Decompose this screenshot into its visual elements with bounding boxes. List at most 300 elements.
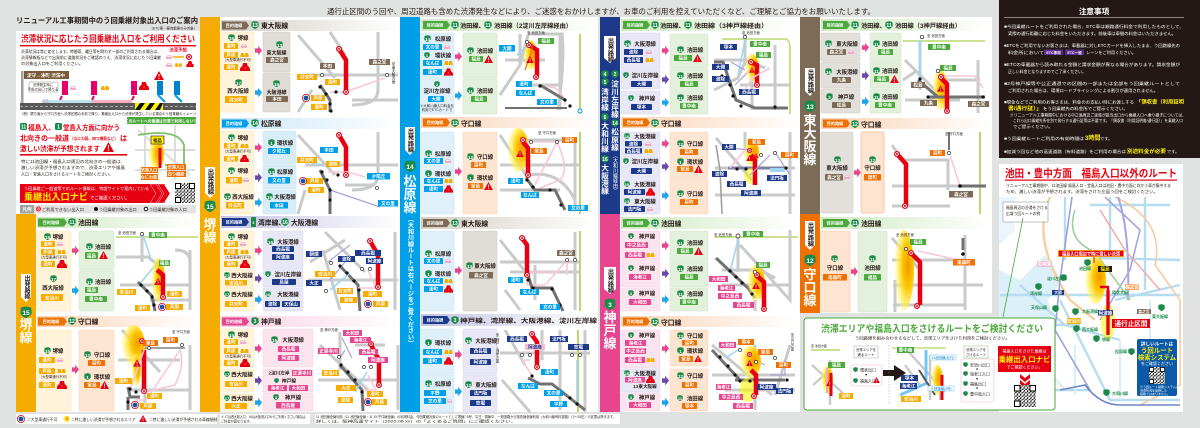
mini map: 福島 <box>153 137 162 144</box>
map: Higashi-Osaka to Ikeda: 至 池田方面 <box>927 33 946 38</box>
header: Ikeda via Kobe: 11 <box>652 23 658 29</box>
notes body: 別途料金が必要 <box>1127 148 1166 155</box>
destination boxes: to Wangan: 16 <box>266 292 271 297</box>
origin boxes: 松島 <box>837 102 846 109</box>
destination box: Higashi-Osaka <box>263 32 290 72</box>
origin boxes: 大阪港線 <box>634 370 656 378</box>
header: Wangan / Osakako: 5 <box>253 221 255 225</box>
map: Matsubara to Moriguchi: 至 守口方面 <box>538 130 557 135</box>
header: Kobe, Wangan, Osakako, Yodogawa: 目的路線 <box>427 317 444 324</box>
map: Matsubara to Kobe etc.: なんば <box>521 383 535 390</box>
header: Higashi-Osaka <box>421 217 597 229</box>
destination boxes: 大阪港線 <box>475 337 497 345</box>
map: Sakai to Moriguchi: 堂島 <box>146 340 155 347</box>
origin boxes: to Matsubara: 湊町 <box>226 155 236 162</box>
header: Matsubara: 14 <box>252 121 258 127</box>
origin box: Nishi-Osaka <box>37 271 71 311</box>
box: navi <box>998 346 1051 372</box>
panel: Sakai column right <box>220 17 400 412</box>
destination box: Higashi-Osaka: 森之宮 <box>270 57 284 64</box>
header: Higashi-Osaka: 13 <box>252 23 258 29</box>
origin boxes: to Kobe: 湊町 <box>226 339 236 346</box>
origin boxes: 平野 <box>430 390 440 397</box>
map: Kobe to Ikeda <box>709 230 798 312</box>
destination boxes: 12 <box>678 142 683 147</box>
illustration caption: （例）堺方面から守口方面へ渋滞区間の手前で降り、乗継出入口から渋滞が発生している場合のう回乗継のイメージ <box>20 111 196 116</box>
origin box: Sakai to Moriguchi <box>37 330 71 411</box>
origin box: 湊町 <box>429 286 438 293</box>
origin boxes: to Wangan: 湊町 <box>226 261 236 268</box>
map: to Moriguchi: 波除 <box>715 171 724 178</box>
route name labels: 西大阪線 <box>1082 326 1098 332</box>
warning heading: （なにわ筋、四つ橋筋など） <box>70 135 118 141</box>
map: Matsubara to Higashi-Osaka: 文の里 <box>543 304 557 311</box>
notes body: 3時間 <box>1085 134 1100 142</box>
route name labels: 大和川線 <box>1112 390 1128 396</box>
destination boxes: 堂島 <box>680 166 690 173</box>
destination box <box>861 132 884 213</box>
card: route search system: 検索システム <box>1138 352 1177 362</box>
origin boxes: to Wangan: 西大阪線 <box>231 272 253 280</box>
header: Ikeda (Kobe): 池田線 <box>661 219 682 228</box>
origin boxes <box>621 132 660 214</box>
origin box: 森之宮 <box>827 174 841 181</box>
origin boxes: to Matsubara: 15 <box>229 169 234 174</box>
header: Moriguchi: 目的路線 <box>627 119 644 126</box>
destination boxes: to Kobe: 阿波座 <box>282 355 296 362</box>
column: departure route 14 Matsubara: 線 <box>403 200 417 215</box>
header: Kobe, Wangan, Osakako, Yodogawa: 神戸線、湾岸線、大阪港線、淀川左岸線 <box>460 317 598 325</box>
column: departure routes Wangan etc. <box>600 17 620 214</box>
origin boxes: to Kobe: 安治川 <box>229 381 243 388</box>
arrow: to Moriguchi <box>72 365 79 374</box>
arrows <box>662 241 669 304</box>
map: Matsubara to Higashi-Osaka: 湊町 <box>511 277 520 284</box>
destination box: 守口線 <box>477 153 494 161</box>
map: Sakai to Moriguchi: 湊町 <box>119 378 128 385</box>
header: Moriguchi: 守口線 <box>661 119 682 128</box>
map: Matsubara to Moriguchi: なんば <box>523 192 537 199</box>
map: to Moriguchi: 大開 <box>724 144 734 151</box>
destination boxes: 福島 <box>684 81 694 88</box>
origin box: 松原線 <box>435 150 452 158</box>
label: avoid route: 渋滞エリアを <box>966 347 986 352</box>
destination box: 森之宮 <box>474 272 488 279</box>
destination boxes: 福島 <box>881 49 890 56</box>
destination boxes: 空堀 <box>476 400 485 407</box>
callout subtext: う回路線を組み合わせるなどして、渋滞エリアをさけた利用をご検討ください。 <box>855 334 1010 340</box>
origin boxes: 神戸線 <box>639 290 656 298</box>
header: Higashi-Osaka: 目的路線 <box>226 22 243 29</box>
origin boxes: to Matsubara: 堺線 <box>238 134 249 142</box>
destination box: Moriguchi <box>79 330 114 411</box>
map: to Higashi-Osaka: 森之宮 <box>373 59 387 66</box>
origin box: 南森町 <box>828 274 842 281</box>
header: Moriguchi: 12 <box>852 122 858 128</box>
destination boxes: 11 <box>678 267 683 272</box>
map: Matsubara to Moriguchi: 堂島 <box>534 148 544 155</box>
destination box: Moriguchi: 1 <box>86 375 89 380</box>
map: to Ikeda via Kobe: 波除 <box>716 76 725 83</box>
origin box: Sakai: 15 <box>45 235 50 240</box>
origin boxes: to Wangan: 15 <box>229 235 234 240</box>
notes body: ■う回乗継ルートご利用の有効時間は <box>1004 135 1084 142</box>
destination boxes: 福島 <box>877 76 886 83</box>
QR code <box>175 183 195 203</box>
destination box: Higashi-Osaka: 13 <box>277 43 282 48</box>
column: departure route 12 Moriguchi: 出発路線 <box>806 221 814 248</box>
route name labels: 湾岸線 <box>1030 290 1042 296</box>
header: Ikeda via Kobe: 池田線、 <box>861 22 886 30</box>
origin boxes: to Wangan: 17 <box>225 292 230 297</box>
destination boxes: 堂島 <box>681 356 691 363</box>
header: Ikeda via Kobe <box>621 19 798 31</box>
destination boxes: 守口線 <box>687 190 704 198</box>
bottom note 1: ご料金が異なります。 <box>221 418 253 424</box>
destination box: 12 <box>468 155 473 160</box>
origin boxes: 16 <box>625 182 630 187</box>
bottom legend: ＝大型車通行不可 <box>27 417 58 422</box>
header: Moriguchi: 12 <box>452 121 458 127</box>
map: to Ikeda via Kobe: 西長堀 <box>742 89 756 96</box>
arrow <box>851 267 858 276</box>
bottom note 2 <box>315 414 620 424</box>
bottom note 1: ※ 17は西大阪入口、16は大阪港入口からご利用ください場合は、 <box>221 414 308 419</box>
header: Wangan / Osakako: 目的路線 <box>226 219 243 226</box>
route names right: 松原線 <box>610 127 620 152</box>
map: Moriguchi to Ikeda <box>892 230 983 312</box>
callout heading: 渋滞エリアや福島入口をさけるルートをご検討ください <box>821 323 1043 335</box>
map: to Matsubara: 芦原 <box>310 178 319 185</box>
destination box: 扇町 <box>868 175 877 180</box>
notes body: 料金所において <box>1008 49 1044 56</box>
header: Ikeda via Kobe: 池田線、 <box>660 22 685 30</box>
origin boxes: to Matsubara: 西大阪線 <box>232 193 254 201</box>
destination boxes: 11 <box>874 42 879 47</box>
origin boxes: 中之島西 <box>626 348 645 355</box>
header: destination Ikeda: 目的路線 <box>43 219 60 226</box>
arrows <box>662 344 669 407</box>
destination boxes: to Matsubara: 環状線 <box>277 139 294 147</box>
origin box <box>821 231 850 312</box>
origin boxes: 九条 <box>837 77 846 84</box>
inset note: 広域う回ルートの例 <box>1006 211 1040 216</box>
map: Higashi-Osaka to Moriguchi: 森之宮 <box>954 191 968 198</box>
destination boxes: to Wangan: 島屋 <box>279 279 289 286</box>
warning body text <box>21 158 125 178</box>
map: to Kobe: 正連寺川 <box>319 348 338 355</box>
destination box: Moriguchi: 環状線 <box>94 373 111 381</box>
panel: Higashi-Osaka and Moriguchi routes <box>820 17 992 313</box>
destination boxes: to Wangan <box>263 231 303 311</box>
origin box: Sakai: 芦原 <box>226 52 236 59</box>
origin boxes: to Matsubara: 17 <box>225 195 230 200</box>
origin boxes: to Wangan: 芦原 <box>226 249 236 256</box>
origin boxes: 淀川左岸線 <box>632 158 659 166</box>
destination boxes: 池田線 <box>687 239 704 247</box>
map: Matsubara to Ikeda: 文の里 <box>540 99 554 106</box>
header: Moriguchi: 守口線 <box>861 120 882 129</box>
map: to Kobe: 海老江 <box>354 337 368 344</box>
destination boxes: 12 <box>678 374 683 379</box>
origin boxes: なんば <box>426 349 440 356</box>
destination box: Moriguchi: 堂島 <box>87 382 97 389</box>
before map: 至 池田方面 <box>811 343 827 348</box>
origin boxes: 波除 <box>629 140 638 147</box>
origin boxes <box>821 33 860 113</box>
column: departure route 3 Kobe: 神 <box>603 310 617 325</box>
label: congested route: 通るルート <box>858 352 874 357</box>
origin box <box>421 231 454 311</box>
origin boxes: 3 <box>630 333 633 338</box>
destination boxes: 16 <box>466 339 471 344</box>
origin boxes: 3 <box>630 266 633 271</box>
column: departure route 14 Matsubara: 出発路線 <box>406 127 414 154</box>
destination box: Osakako: 大阪港線 <box>266 89 287 96</box>
column: departure route 15 Sakai (left): 出発路線 <box>23 274 30 300</box>
route steps after: ▼ <box>975 368 979 372</box>
route map <box>999 197 1182 405</box>
map: to Matsubara: 湊町 <box>311 187 321 194</box>
destination boxes: to Kobe: 西長堀 <box>282 346 296 353</box>
big arrow <box>883 365 906 381</box>
origin boxes: to Kobe: 西大阪線 <box>231 394 253 402</box>
notes body: です。 <box>1167 149 1179 155</box>
card: route search system: 詳しいルートは <box>1141 340 1173 348</box>
map: to Ikeda via Kobe <box>712 30 790 114</box>
header: destination Moriguchi <box>37 316 199 327</box>
destination box: 池田線 <box>864 264 881 272</box>
column: departure route 13 Higashi-Osaka <box>800 17 820 214</box>
notes body: ※リニューアル工事期間中における中之島周辺ご迷惑が該当出口から乗継入口へ乗り継ぎについては、 <box>1010 112 1186 118</box>
junction labels: 尼崎東 <box>1038 261 1052 268</box>
destination boxes: 12 <box>678 192 683 197</box>
origin boxes: 大阪港線 <box>836 68 858 76</box>
header: Matsubara: 目的路線 <box>226 120 243 127</box>
destination boxes: 11 <box>678 96 683 101</box>
origin boxes: 大阪港線 <box>634 132 656 140</box>
map: to Matsubara: 夕陽丘 <box>372 173 386 180</box>
map: Sakai to Moriguchi: 湊町 <box>150 393 159 400</box>
origin boxes: to Kobe <box>221 329 254 411</box>
destination boxes <box>463 329 497 412</box>
destination box: Osakako: 16 <box>274 82 279 87</box>
origin boxes: to Matsubara: 堺線 <box>238 167 249 175</box>
label: Fukushima: 福島 <box>1100 266 1110 273</box>
destination boxes: 池田線 <box>687 290 704 298</box>
route name labels: 環状大阪 <box>1112 289 1128 295</box>
warning heading: 福島入、 <box>28 123 55 132</box>
destination box: Ikeda 2: 福島 <box>87 287 96 294</box>
destination boxes: to Matsubara: 松原線 <box>277 168 294 176</box>
destination boxes: to Kobe: 16 <box>272 338 277 343</box>
map: to Moriguchi: 阿波座 <box>744 190 758 197</box>
origin box: 1 <box>427 172 430 177</box>
destination boxes: to Wangan: 天保山 <box>284 301 298 308</box>
heading: 池田・豊中方面 福島入口以外のルート <box>1005 167 1177 180</box>
header: Ikeda via Kobe: 11 <box>685 23 691 29</box>
destination box <box>463 231 497 311</box>
destination boxes: 環状線 <box>687 158 704 166</box>
call to action: navi: 乗継出入口ナビ <box>24 191 88 202</box>
destination boxes: to Wangan: 淀川左岸線 <box>275 270 302 278</box>
notes body: です。 <box>1100 136 1112 142</box>
header: Ikeda: 池田線 <box>861 219 882 228</box>
header: Matsubara <box>221 118 399 129</box>
column: departure route 15 Sakai (right): 線 <box>203 230 217 245</box>
origin boxes: 淀川左岸線 <box>424 87 451 95</box>
origin boxes: 東大阪線 <box>836 40 858 48</box>
route name labels <box>1030 259 1168 396</box>
destination box: Osakako <box>263 73 290 112</box>
header: Wangan / Osakako: 大阪港線 <box>291 218 318 227</box>
destination boxes: 11 <box>874 69 879 74</box>
origin boxes: to Matsubara: 湊町 <box>229 177 239 184</box>
origin boxes: 東大阪線 <box>634 198 656 206</box>
header: Kobe, Wangan, Osakako, Yodogawa: 3 <box>454 318 457 324</box>
map: to Kobe: 波除 <box>341 397 350 404</box>
origin box: Sakai to Moriguchi: （大型車通行不可） <box>39 374 69 379</box>
destination boxes: 守口線 <box>687 372 704 380</box>
map: to Wangan: 波除 <box>344 297 353 304</box>
arrows <box>862 43 869 106</box>
map: to Kobe: 安治川 <box>324 370 338 377</box>
destination boxes: 13 <box>466 383 471 388</box>
box: navi: 乗継出入口ナビ <box>999 355 1050 364</box>
map: Sakai to Moriguchi <box>115 325 191 410</box>
origin box: Sakai <box>221 32 254 72</box>
label: Fukushima <box>1098 266 1112 273</box>
origin box: 守口線 <box>827 264 844 272</box>
panel: routes other than Fukushima entrance <box>999 164 1183 412</box>
header: Ikeda via Yodogawa: 池田線、 <box>460 22 485 30</box>
intro text <box>1006 182 1171 195</box>
destination boxes: 守口線 <box>687 332 704 340</box>
junction labels: 森之宮 <box>1138 309 1150 314</box>
header: Ikeda via Yodogawa: 11 <box>485 23 491 29</box>
origin box: Sakai: 堺線 <box>53 233 64 241</box>
destination boxes: to Matsubara: 夕陽丘 <box>272 148 286 155</box>
map: Kobe to Moriguchi: 海老江 <box>717 384 731 391</box>
destination boxes: to Wangan: 西長堀 <box>276 246 290 253</box>
origin boxes: 13 <box>625 199 630 204</box>
origin box: Sakai: 湊町 <box>226 64 236 71</box>
junction labels: 安治川 <box>1067 318 1081 325</box>
destination boxes: to Kobe: 西長堀 <box>281 402 295 409</box>
map: Matsubara to Higashi-Osaka <box>500 231 580 311</box>
guide body text <box>21 48 162 67</box>
route steps before: 福島入口 <box>860 378 876 384</box>
route names right <box>610 70 620 193</box>
callout: severe congestion: 福島入口周辺で特に激しい渋滞 <box>1062 250 1120 258</box>
map: to Wangan: 芦原 <box>376 301 385 308</box>
origin box: 文の里 <box>427 158 441 165</box>
header: Ikeda via Yodogawa <box>421 19 597 31</box>
route names right: （大和川線経由） <box>612 153 618 193</box>
destination box: Moriguchi: 12 <box>85 353 90 358</box>
column: departure route 3 Kobe <box>600 214 620 412</box>
origin boxes <box>621 330 660 411</box>
header: destination Ikeda: 池田線 <box>78 218 99 227</box>
route names right: 14 <box>612 121 618 127</box>
origin boxes: to Matsubara: 湊町 <box>226 142 236 149</box>
guide title <box>16 16 198 30</box>
destination boxes: 池田線 <box>687 72 704 80</box>
origin boxes: 西長堀 <box>628 357 642 364</box>
origin boxes: 16 <box>625 134 630 139</box>
map: Kobe to Moriguchi: 阿波座 <box>760 384 774 391</box>
destination boxes: to Kobe <box>263 329 313 411</box>
origin boxes: to Kobe: 湊町 <box>226 360 236 367</box>
destination box: Ikeda 1: 福島 <box>87 252 96 259</box>
destination boxes: 11 <box>678 396 683 401</box>
destination boxes: to Matsubara: 14 <box>269 170 274 175</box>
panel: Sakai to Ikeda / Moriguchi <box>36 214 200 412</box>
origin boxes: 環状線 <box>435 339 452 347</box>
origin boxes: 森之宮 <box>830 49 844 56</box>
map: to Moriguchi: 堂島 <box>752 139 761 146</box>
header: Wangan / Osakako <box>221 216 399 228</box>
panel: Matsubara routes <box>420 17 598 412</box>
origin box: Nishi-Osaka: 西大阪線 <box>227 87 249 95</box>
header: Higashi-Osaka: 目的路線 <box>427 220 444 227</box>
heading rule <box>1005 180 1177 181</box>
origin box: Sakai: 15 <box>229 36 234 41</box>
origin boxes: 3 <box>828 95 831 100</box>
route names right: 淀川左岸線 <box>610 79 620 119</box>
arrows <box>662 139 669 200</box>
destination boxes: 12 <box>678 334 683 339</box>
destination boxes: to Wangan: 2 <box>267 272 270 277</box>
map: to Moriguchi: 西長堀 <box>730 181 744 188</box>
header: Moriguchi: 守口線 <box>461 119 482 128</box>
map: Kobe to Ikeda: 西長堀 <box>737 302 751 309</box>
header: Ikeda: 目的路線 <box>827 220 844 227</box>
destination box: Ikeda 1: 池田線 <box>95 243 112 251</box>
origin box: Nishi-Osaka <box>221 73 254 112</box>
map: Sakai to Moriguchi: 至 守口方面 <box>172 329 191 334</box>
destination boxes: 福島 <box>680 248 690 255</box>
warning body text: 激しい渋滞が予想されますので、渋滞エリアや福島 <box>21 164 125 171</box>
card: route search system: ※う回ルート検索システムは、 <box>1140 384 1182 389</box>
map: to Kobe: 大和田 <box>346 330 360 337</box>
header: Moriguchi (Kobe): 12 <box>652 320 658 326</box>
destination boxes: 扇町 <box>684 200 694 205</box>
QR code <box>1014 385 1036 407</box>
map: to Wangan <box>306 232 398 311</box>
column: departure route 3 Kobe: 出発路線 <box>606 268 614 295</box>
origin boxes: 2 <box>625 159 628 164</box>
origin boxes: to Wangan: 17 <box>225 273 230 278</box>
destination boxes: to Wangan: 大阪港線 <box>277 290 299 298</box>
map: Matsubara to Ikeda: 大開 <box>502 45 512 52</box>
destination boxes <box>463 33 497 114</box>
origin boxes: 2 <box>436 82 439 87</box>
map: Higashi-Osaka to Moriguchi <box>892 131 986 214</box>
destination boxes: 扇町 <box>685 340 694 345</box>
map: Matsubara to Kobe etc. <box>495 330 590 412</box>
map: Moriguchi to Ikeda: 福島 <box>913 239 923 246</box>
header: Ikeda via Kobe <box>821 19 991 31</box>
header: Kobe: 3 <box>254 319 257 325</box>
card: route search system <box>1137 339 1182 396</box>
destination box: Osakako: 本田 <box>272 96 282 103</box>
inset note: 福島周辺の渋滞をさける <box>1006 205 1048 210</box>
destination boxes: 池田線 <box>687 94 704 102</box>
map: Sakai to Ikeda: 湊町 <box>170 291 179 298</box>
origin boxes <box>621 231 660 311</box>
map: to Higashi-Osaka: 本田 <box>323 63 332 70</box>
